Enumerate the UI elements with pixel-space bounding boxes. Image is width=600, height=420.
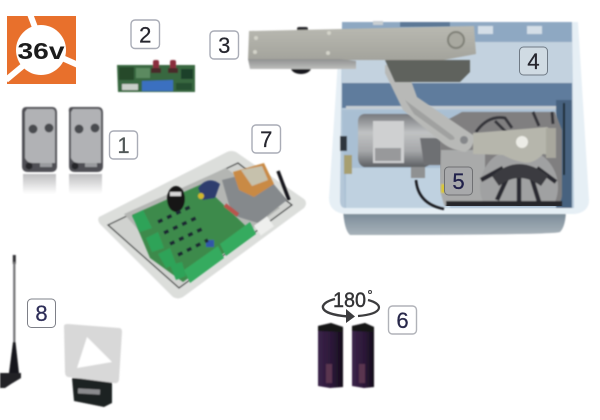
icon: gate opener foundation box — [248, 21, 589, 235]
badge 2: 2 — [139, 22, 151, 48]
enclosure — [98, 151, 306, 298]
gearbox — [440, 110, 563, 206]
circuit board — [132, 180, 256, 283]
remote left — [22, 107, 57, 194]
badge 6: 6 — [396, 308, 409, 333]
badge 4 — [520, 47, 548, 75]
icon: 36v logo: 36v — [18, 38, 65, 64]
remote right — [69, 107, 103, 194]
badge 6 — [388, 306, 416, 334]
motor — [358, 114, 444, 209]
badge 2 — [131, 20, 160, 48]
photocell right — [352, 323, 374, 388]
icon: flashing lamp — [64, 324, 122, 407]
badge 1: 1 — [117, 133, 130, 158]
badge 3: 3 — [218, 33, 230, 58]
badge 8 — [28, 299, 56, 328]
photocell left — [318, 323, 343, 388]
badge 7 — [252, 125, 280, 153]
icon: 36v logo — [6, 14, 78, 84]
lever arm — [385, 64, 556, 163]
mounting arm — [248, 26, 476, 82]
icon: remote controls — [22, 107, 103, 194]
badge 3 — [210, 31, 238, 59]
icon: antenna — [0, 255, 21, 388]
badge 5 — [444, 167, 472, 195]
badge 8: 8 — [35, 301, 48, 326]
icon: control unit — [98, 151, 306, 298]
badge 5: 5 — [452, 169, 465, 194]
badge 7: 7 — [260, 127, 272, 152]
transformer — [222, 163, 289, 236]
badge 4: 4 — [527, 49, 540, 74]
icon: receiver board — [117, 60, 195, 92]
rotation arrow: 180 — [333, 289, 366, 312]
badge 1 — [110, 131, 138, 159]
icon: photocells with 180 degree arrow — [318, 289, 379, 388]
box body — [329, 21, 589, 235]
